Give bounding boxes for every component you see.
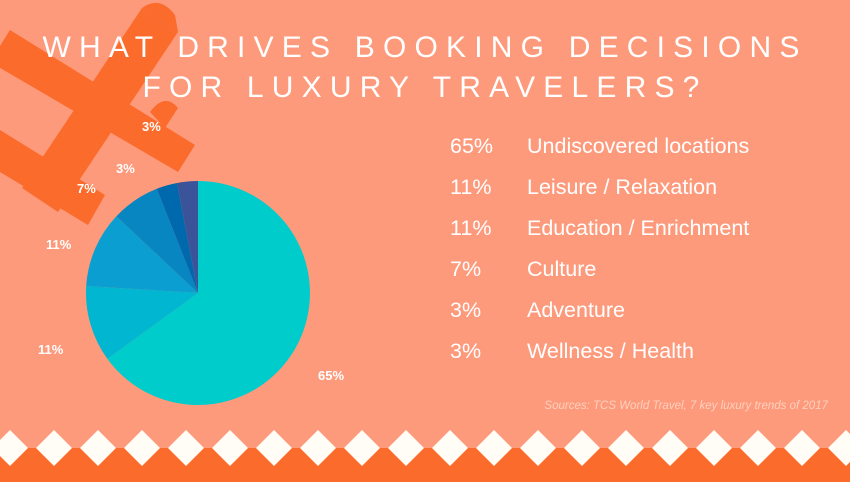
legend list: 7%: [450, 257, 481, 281]
legend list: 3%: [450, 298, 481, 322]
footer diamonds band: [0, 430, 850, 482]
pie labels: 11%: [38, 342, 64, 357]
legend list: 3%: [450, 339, 481, 363]
legend list: Wellness / Health: [527, 339, 694, 363]
pie labels: 3%: [116, 161, 135, 176]
legend list: 11%: [450, 216, 491, 240]
pie chart: [86, 181, 310, 405]
title: WHAT DRIVES BOOKING DECISIONS: [42, 31, 808, 64]
pie labels: 11%: [46, 237, 72, 252]
legend list: 11%: [450, 175, 491, 199]
legend list: Leisure / Relaxation: [527, 175, 717, 199]
legend list: Undiscovered locations: [527, 134, 749, 158]
legend list: Education / Enrichment: [527, 216, 749, 240]
legend list: Adventure: [527, 298, 625, 322]
pie labels: 3%: [142, 119, 161, 134]
source note: Sources: TCS World Travel, 7 key luxury trends of 2017: [544, 400, 828, 412]
title: FOR LUXURY TRAVELERS?: [142, 71, 708, 104]
legend list: 65%: [450, 134, 493, 158]
title: [42, 31, 808, 104]
pie labels: 65%: [318, 368, 344, 383]
icon: airplane: [0, 3, 195, 225]
legend list: Culture: [527, 257, 596, 281]
pie labels: 7%: [77, 181, 96, 196]
pie labels: [38, 119, 344, 383]
